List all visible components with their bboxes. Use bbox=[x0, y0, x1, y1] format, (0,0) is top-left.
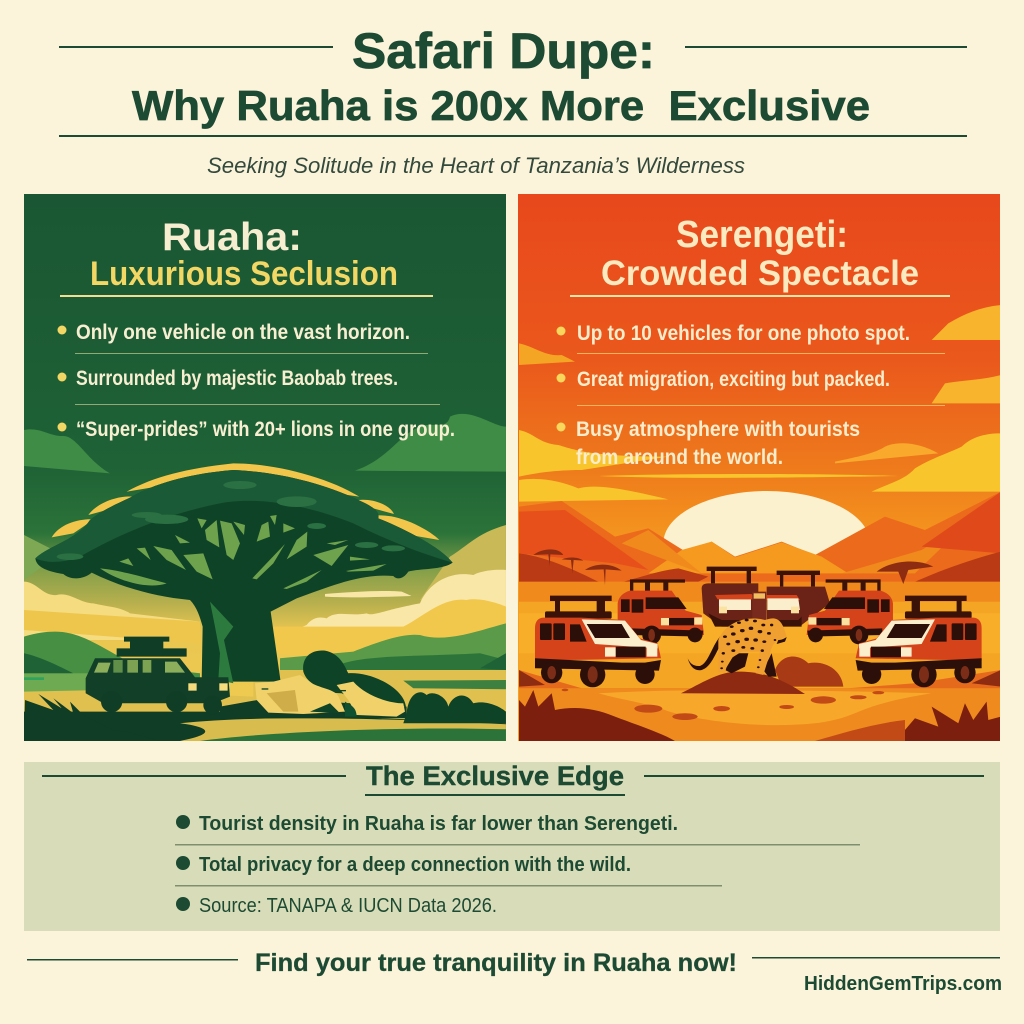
mounds bbox=[681, 656, 843, 694]
Ruaha heading: Luxurious Seclusion bbox=[90, 255, 398, 293]
ground bbox=[24, 670, 506, 741]
Serengeti heading: Crowded Spectacle bbox=[601, 254, 919, 293]
Serengeti bullets: Great migration, exciting but packed. bbox=[577, 368, 890, 391]
title: Why Ruaha is 200x More Exclusive bbox=[132, 82, 870, 129]
Ruaha bullets: Only one vehicle on the vast horizon. bbox=[76, 321, 410, 344]
panel: The Exclusive Edge bbox=[24, 761, 1000, 931]
call to action: Find your true tranquility in Ruaha now! bbox=[255, 949, 737, 977]
sunset clouds bbox=[519, 305, 1001, 502]
Serengeti bullets: Busy atmosphere with tourists bbox=[576, 418, 860, 441]
Ruaha bullets: “Super-prides” with 20+ lions in one group. bbox=[76, 418, 455, 441]
illustration: baobab savanna scene bbox=[24, 414, 506, 741]
back vehicles bbox=[618, 579, 893, 644]
panel bullets: Tourist density in Ruaha is far lower than Serengeti. bbox=[199, 813, 678, 835]
Ruaha bullets: Surrounded by majestic Baobab trees. bbox=[76, 367, 398, 390]
pebbles bbox=[562, 689, 884, 720]
centre vehicles bbox=[702, 567, 830, 627]
ground bbox=[519, 602, 1001, 741]
Ruaha heading: Ruaha: bbox=[162, 216, 302, 259]
cheetah bbox=[688, 618, 787, 677]
baobab tree bbox=[35, 463, 453, 683]
Serengeti bullets: Up to 10 vehicles for one photo spot. bbox=[577, 322, 910, 345]
Serengeti heading bbox=[570, 214, 950, 297]
hills bbox=[24, 623, 506, 693]
title bbox=[59, 23, 967, 137]
Ruaha bullets bbox=[58, 321, 455, 441]
front vehicles bbox=[535, 596, 982, 687]
foreground scrub bbox=[519, 690, 1001, 741]
clouds bbox=[24, 414, 506, 673]
Ruaha heading bbox=[60, 216, 433, 297]
illustration: crowded savanna scene bbox=[519, 305, 1001, 741]
panel bullets: Total privacy for a deep connection with the wild. bbox=[199, 854, 631, 876]
grass bbox=[24, 694, 160, 741]
panel: Ruaha bbox=[24, 194, 506, 741]
bushes bbox=[403, 692, 506, 723]
panel heading: The Exclusive Edge bbox=[366, 761, 624, 791]
subtitle: Seeking Solitude in the Heart of Tanzania’s Wilderness bbox=[207, 153, 745, 178]
panel: Serengeti bbox=[518, 194, 1001, 741]
mountains bbox=[519, 492, 1001, 613]
safari vehicle silhouette bbox=[86, 637, 230, 714]
panel bullets bbox=[175, 813, 860, 917]
panel bullets: Source: TANAPA & IUCN Data 2026. bbox=[199, 895, 497, 917]
Serengeti heading: Serengeti: bbox=[676, 214, 848, 256]
sun bbox=[663, 491, 870, 596]
title: Safari Dupe: bbox=[352, 23, 655, 79]
lions bbox=[220, 651, 407, 718]
Serengeti bullets: from around the world. bbox=[576, 446, 783, 469]
Serengeti bullets bbox=[556, 322, 945, 469]
acacia trees bbox=[533, 549, 933, 585]
website credit: HiddenGemTrips.com bbox=[804, 973, 1002, 995]
